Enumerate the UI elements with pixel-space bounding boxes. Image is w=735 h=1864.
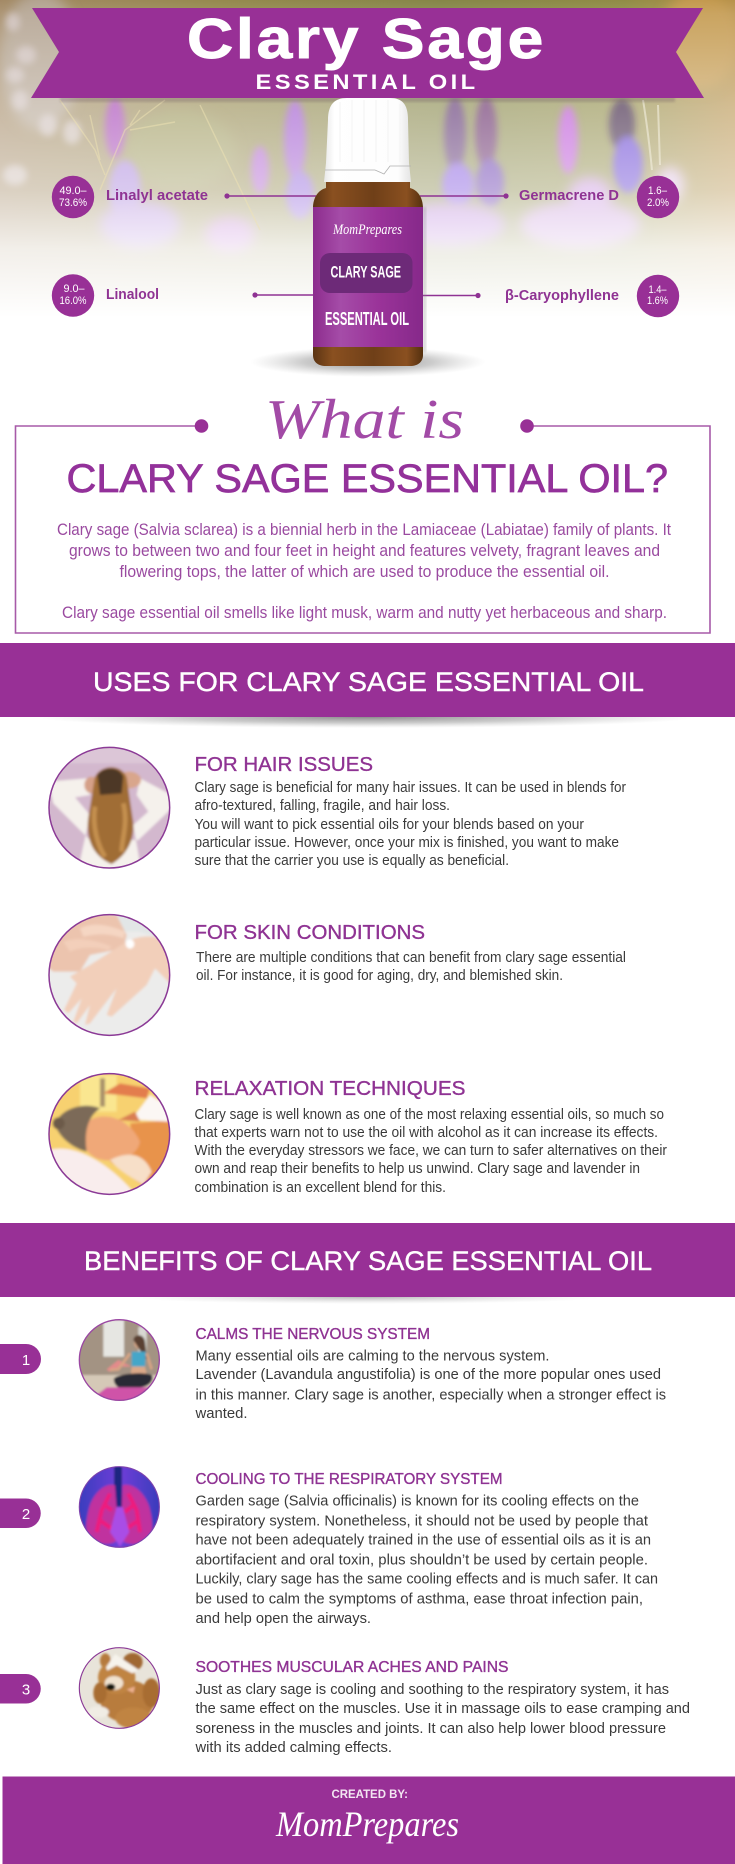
compound: Linalool: Linalool <box>106 287 159 303</box>
text: soothes: the same effect on the muscles. Use it in massage oils to ease cramping and <box>196 1701 690 1717</box>
compound: Linalool <box>52 274 159 317</box>
heading band: uses <box>0 643 735 717</box>
script heading: What is: What is <box>265 389 464 451</box>
compound: beta-Caryophyllene: 1.6% <box>647 295 668 307</box>
heading band: benefits: BENEFITS OF CLARY SAGE ESSENTIAL OIL <box>84 1246 652 1276</box>
heading: for hair issues: FOR HAIR ISSUES <box>194 754 373 776</box>
brand logo text: MomPrepares <box>275 1804 459 1844</box>
use: hair issues <box>48 746 626 869</box>
text: relaxation: own and reap their benefits to help us unwind. Clary sage and lavender in <box>194 1160 640 1177</box>
text: calms: in this manner. Clary sage is another, especially when a stronger effect is <box>196 1388 666 1404</box>
text: soothes: soreness in the muscles and joints. It can also help lower blood pressure <box>196 1721 666 1737</box>
compound: beta-Caryophyllene <box>505 275 679 317</box>
text: soothes: Just as clary sage is cooling and soothing to the respiratory system, it has <box>196 1682 669 1698</box>
text: cooling: be used to calm the symptoms of asthma, ease throat infection pain, <box>196 1592 643 1608</box>
text: calms: Lavender (Lavandula angustifolia) is one of the more popular ones used <box>196 1367 661 1383</box>
bottle label: brand: MomPrepares <box>332 222 402 238</box>
description text: Clary sage (Salvia sclarea) is a biennial herb in the Lamiaceae (Labiatae) family of plants. It <box>57 521 671 539</box>
text: cooling: abortifacient and oral toxin, plus shouldn’t be used by certain people. <box>196 1552 648 1568</box>
compound: beta-Caryophyllene: 1.4– <box>648 284 667 296</box>
text: relaxation: that experts warn not to use the oil with alcohol as it can increase its effects. <box>194 1124 658 1141</box>
photo: woman with long hair <box>48 746 170 869</box>
benefit 1: calms the nervous system <box>0 1319 666 1418</box>
compound: Linalyl acetate: 73.6% <box>59 197 87 209</box>
text: hair: Clary sage is beneficial for many hair issues. It can be used in blends for <box>194 779 626 796</box>
heading band: benefits <box>0 1223 735 1297</box>
text: cooling <box>196 1494 658 1627</box>
text: calms: Many essential oils are calming to the nervous system. <box>196 1348 550 1364</box>
number tab 2: 2 <box>22 1506 30 1523</box>
text: soothes <box>194 1682 690 1756</box>
text: skin: oil. For instance, it is good for aging, dry, and blemished skin. <box>196 967 563 984</box>
number tab 1 <box>0 1344 41 1374</box>
number tab 2 <box>0 1498 41 1528</box>
description text: grows to between two and four feet in height and features velvety, fragrant leaves and <box>69 542 660 560</box>
compound: beta-Caryophyllene: β-Caryophyllene <box>505 288 619 304</box>
text: cooling: and help open the airways. <box>196 1611 371 1627</box>
text: relaxation: combination is an excellent blend for this. <box>194 1179 446 1196</box>
text: relaxation: With the everyday stressors we face, we can turn to safer alternatives on their <box>194 1142 667 1159</box>
text: cooling: have not been adequately trained in the use of essential oils as it is an <box>196 1532 651 1548</box>
compound: Germacrene D <box>519 176 679 218</box>
text: cooling: respiratory system. Nonetheless, it should not be used by people that <box>196 1514 648 1530</box>
heading: soothes muscular aches and pains: SOOTHES MUSCULAR ACHES AND PAINS <box>196 1659 508 1676</box>
panel: what is clary sage essential oil <box>16 389 710 633</box>
photo: bandaged teddy bear <box>78 1647 160 1729</box>
number tab 1: 1 <box>22 1352 30 1369</box>
photo: woman at massage <box>48 1072 170 1196</box>
text: cooling: Luckily, clary sage has the same cooling effects and is much safer. It can <box>196 1572 658 1588</box>
subtitle: essential oil: ESSENTIAL OIL <box>256 71 478 94</box>
text: cooling: Garden sage (Salvia officinalis) is known for its cooling effects on the <box>196 1494 639 1510</box>
text: relaxation: Clary sage is well known as one of the most relaxing essential oils, so much so <box>194 1106 664 1123</box>
title: Clary Sage: Clary Sage <box>187 7 546 71</box>
heading: clary sage essential oil?: CLARY SAGE ESSENTIAL OIL? <box>66 457 668 501</box>
text: calms: wanted. <box>194 1406 248 1422</box>
connector lines <box>224 193 509 298</box>
text: hair: You will want to pick essential oils for your blends based on your <box>194 816 584 833</box>
bottle label: name plate <box>320 253 412 293</box>
text: relaxation <box>194 1106 667 1196</box>
heading: calms the nervous system: CALMS THE NERVOUS SYSTEM <box>196 1326 430 1343</box>
benefit 2: cooling to the respiratory system <box>0 1457 658 1627</box>
text: skin <box>196 949 626 984</box>
compound: Germacrene D: 1.6– <box>648 185 668 197</box>
composition list: left and right <box>52 176 679 317</box>
footer <box>2 1776 735 1864</box>
text: calms <box>194 1348 666 1422</box>
heading: for skin conditions: FOR SKIN CONDITIONS <box>194 922 425 944</box>
photo: hands applying cream <box>48 914 170 1036</box>
banner shadow <box>60 97 675 102</box>
created by label: CREATED BY: <box>332 1789 408 1801</box>
benefit 3: soothes muscular aches and pains <box>0 1638 690 1756</box>
compound: Linalool: 9.0– <box>64 283 85 295</box>
bottle label: essential oil: ESSENTIAL OIL <box>325 309 409 329</box>
number tab 3: 3 <box>22 1682 30 1698</box>
text: hair: particular issue. However, once your mix is finished, you want to make <box>194 834 619 851</box>
compound: Linalool: 16.0% <box>60 295 87 307</box>
photo: woman meditating <box>78 1319 160 1401</box>
bottle label: name plate: CLARY SAGE <box>330 262 401 282</box>
photo: lungs <box>78 1466 160 1548</box>
description text: Clary sage essential oil smells like light musk, warm and nutty yet herbaceous and sharp. <box>62 604 667 622</box>
description text: flowering tops, the latter of which are used to produce the essential oil. <box>120 563 610 581</box>
band shadow: benefits <box>127 1290 607 1304</box>
hero photo background: lavender field <box>0 0 735 345</box>
compound: Germacrene D: 2.0% <box>647 197 669 209</box>
heading band: uses: USES FOR CLARY SAGE ESSENTIAL OIL <box>93 667 644 697</box>
bottle illustration <box>250 98 486 377</box>
heading: relaxation techniques: RELAXATION TECHNIQUES <box>194 1078 466 1100</box>
use: relaxation techniques <box>48 1072 667 1196</box>
compound: Linalyl acetate <box>52 176 208 218</box>
heading: cooling to the respiratory system: COOLING TO THE RESPIRATORY SYSTEM <box>196 1471 502 1488</box>
text: hair <box>194 779 626 869</box>
description text <box>57 521 671 622</box>
compound: Linalyl acetate: Linalyl acetate <box>106 188 208 204</box>
compound: Linalyl acetate: 49.0– <box>60 185 87 197</box>
text: soothes: with its added calming effects. <box>194 1740 392 1756</box>
bottle cap <box>324 98 411 182</box>
text: hair: sure that the carrier you use is equally as beneficial. <box>194 852 509 869</box>
use: skin conditions <box>48 914 625 1036</box>
text: skin: There are multiple conditions that can benefit from clary sage essential <box>196 949 626 966</box>
title banner <box>31 7 704 98</box>
text: hair: afro-textured, falling, fragile, and hair loss. <box>194 797 450 814</box>
number tab 3 <box>0 1674 41 1704</box>
compound: Germacrene D: Germacrene D <box>519 188 619 204</box>
band shadow: uses <box>37 706 697 728</box>
